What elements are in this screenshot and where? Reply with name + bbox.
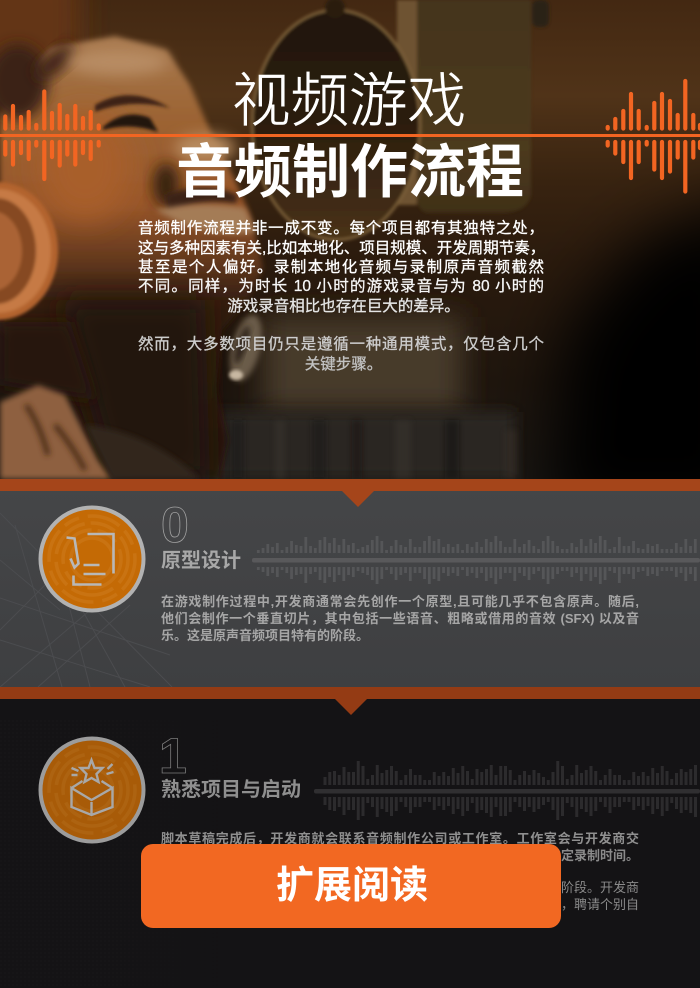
step 0 body text: 乐。这是原声音频项目特有的阶段。 <box>161 628 369 643</box>
intro paragraph: 不同。同样，为时长 10 小时的游戏录音与为 80 小时的 <box>138 278 544 295</box>
intro closing paragraph <box>138 336 544 373</box>
hero photo: singer at microphone <box>0 0 700 479</box>
intro paragraph <box>138 220 545 315</box>
step 1 body text: 定录制时间。 <box>561 848 639 863</box>
read more button <box>141 844 561 928</box>
step 0 body text: 他们会制作一个垂直切片，其中包括一些语音、粗略或借用的音效 (SFX) 以及音 <box>161 611 639 626</box>
intro closing paragraph: 关键步骤。 <box>305 356 382 373</box>
title line two: 音频制作流程 <box>176 140 524 204</box>
step 1 body text: ，聘请个别自 <box>561 897 639 912</box>
step 0 waveform <box>252 536 700 584</box>
left waveform <box>3 89 101 182</box>
right waveform <box>606 78 700 194</box>
step 0 body text <box>161 594 639 643</box>
step 1 waveform <box>314 761 700 820</box>
chevron: step 1 <box>335 699 367 715</box>
intro paragraph: 这与多种因素有关,比如本地化、项目规模、开发周期节奏， <box>138 240 545 257</box>
panel: step 0 prototype <box>0 479 700 687</box>
step 0 body text: 在游戏制作过程中,开发商通常会先创作一个原型,且可能几乎不包含原声。随后, <box>161 594 639 609</box>
panel: step 1 kickoff <box>0 687 700 699</box>
band <box>0 687 700 699</box>
step 1 heading: 熟悉项目与启动 <box>161 779 301 801</box>
icon: step 0 document badge <box>38 506 146 612</box>
top band <box>0 479 700 491</box>
intro paragraph: 甚至是个人偏好。录制本地化音频与录制原声音频截然 <box>138 259 544 276</box>
intro paragraph: 游戏录音相比也存在巨大的差异。 <box>227 298 460 315</box>
chevron: step 0 <box>342 491 374 507</box>
icon: step 1 box badge <box>38 736 146 844</box>
title line one: 视频游戏 <box>232 69 466 134</box>
intro closing paragraph: 然而，大多数项目仍只是遵循一种通用模式，仅包含几个 <box>138 336 544 353</box>
step 1 body text <box>161 831 639 912</box>
step 1 body text: 脚本草稿完成后，开发商就会联系音频制作公司或工作室。工作室会与开发商交 <box>161 831 639 846</box>
read more button: 扩展阅读 <box>276 865 428 907</box>
intro paragraph: 音频制作流程并非一成不变。每个项目都有其独特之处， <box>138 220 544 237</box>
step 0 heading: 原型设计 <box>161 550 241 572</box>
step 1 body text: 阶段。开发商 <box>561 880 639 895</box>
title rule <box>0 134 700 137</box>
